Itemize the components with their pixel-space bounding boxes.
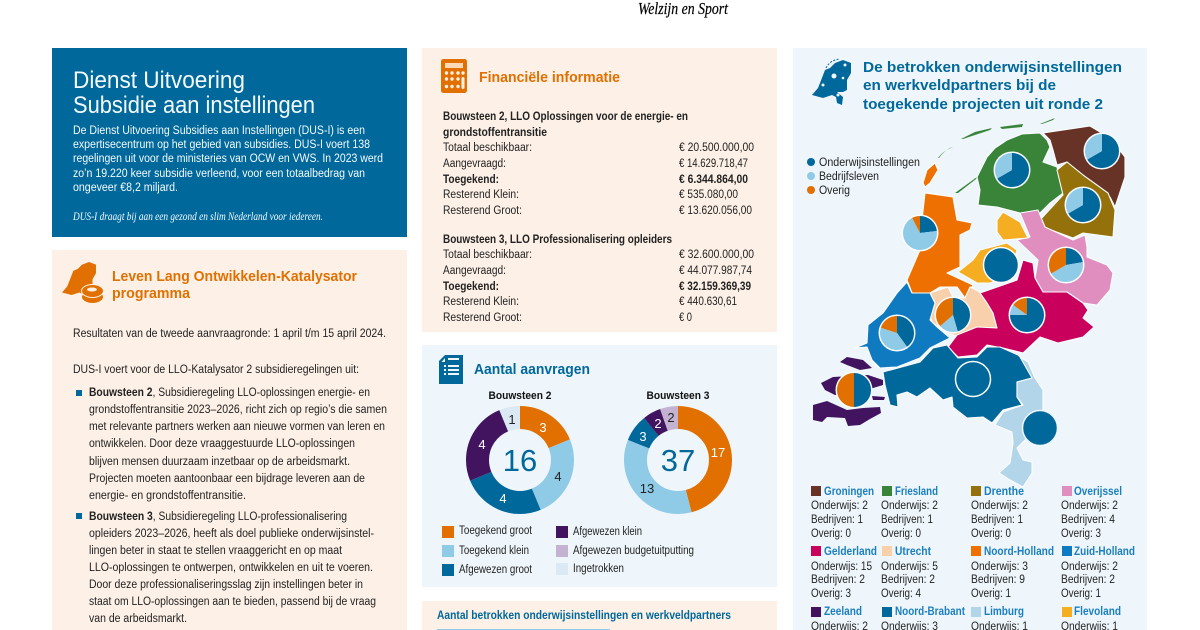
province list: row 2: Onderwijs: 2 <box>1061 561 1118 573</box>
table: Bouwsteen 3 finance: Aangevraagd: <box>443 265 506 277</box>
icon: document <box>439 355 463 384</box>
province list: row 1: Bedrijven: 4 <box>1061 514 1116 526</box>
legend: aanvragen status: Afgewezen klein <box>573 526 642 538</box>
province: Overijssel <box>1017 210 1113 305</box>
text block: results period: Resultaten van de tweede aanvraagronde: 1 april t/m 15 april 2024. <box>73 328 386 340</box>
text block: DUS-I description: zo’n 19.220 keer subsidie verleend, voor een totaalbedrag van <box>73 168 365 180</box>
pie: Noord-Holland <box>902 214 938 252</box>
table: Bouwsteen 2 finance: Aangevraagd: <box>443 158 506 170</box>
pie: Noord-Brabant <box>956 362 990 396</box>
province list: row 3: Zeeland <box>824 606 862 618</box>
province list: row 1: Overig: 0 <box>811 528 851 540</box>
province: Drenthe <box>1040 162 1115 238</box>
table: Bouwsteen 2 finance: Resterend Groot: <box>443 205 522 217</box>
text block: DUS-I description: ongeveer €8,2 miljard. <box>73 182 178 194</box>
province list: row 1: Drenthe <box>984 486 1024 498</box>
province list: row 3 <box>811 606 1121 630</box>
legend: aanvragen status: Ingetrokken <box>573 563 624 575</box>
legend: aanvragen status: Toegekend groot <box>459 525 533 537</box>
text block: DUS-I description: DUS-I draagt bij aan een gezond en slim Nederland voor iedereen. <box>72 209 323 223</box>
table: Bouwsteen 3 finance: Bouwsteen 3, LLO Professionalisering opleiders <box>443 234 672 246</box>
bullet: Bouwsteen 3 <box>76 511 376 625</box>
table: Bouwsteen 3 finance: € 0 <box>679 312 692 324</box>
table: Bouwsteen 3 finance: € 440.630,61 <box>679 296 737 308</box>
legend: aanvragen status: Afgewezen budgetuitputting <box>573 545 694 557</box>
donut chart: Bouwsteen 3: 2 <box>654 416 662 431</box>
province list: row 1: Overig: 0 <box>881 528 921 540</box>
legend: partner types <box>807 157 920 197</box>
heading: Dienst Uitvoering: Subsidie aan instellingen <box>73 92 315 119</box>
pie: Groningen <box>1084 132 1120 170</box>
bullet: Bouwsteen 3: Door deze professionaliseringsslag zijn instellingen beter in <box>89 579 363 591</box>
text block: DUS-I description: regelingen uit voor de ministeries van OCW en VWS. In 2023 werd <box>73 153 383 165</box>
table: Bouwsteen 2 finance: € 535.080,00 <box>679 189 738 201</box>
panel: Leven Lang Ontwikkelen-Katalysator programma <box>52 250 407 630</box>
heading: map title <box>863 59 1122 113</box>
bullet: Bouwsteen 3: LLO-oplossingen te ontwerpen, ontwikkelen en uit te voeren. <box>89 562 373 574</box>
province list: row 1: Overijssel <box>1074 486 1122 498</box>
province list: row 1 <box>811 486 1122 540</box>
heading: programme: Leven Lang Ontwikkelen-Katalysator <box>112 268 357 285</box>
text block: DUS-I description: expertisecentrum op het gebied van subsidies. DUS-I voert 138 <box>73 139 370 151</box>
province: Flevoland <box>958 212 1028 283</box>
donut chart: Bouwsteen 2 <box>478 390 562 506</box>
heading: map title: en werkveldpartners bij de <box>863 77 1056 94</box>
province list: row 1: Bedrijven: 1 <box>971 514 1023 526</box>
province: Zuid-Holland <box>855 282 950 368</box>
pie: Friesland <box>994 152 1030 188</box>
province list: row 2: Bedrijven: 9 <box>971 574 1025 586</box>
province: Noord-Holland <box>907 163 973 298</box>
province: Limburg <box>995 357 1043 487</box>
donut chart: Bouwsteen 3: 3 <box>639 429 647 444</box>
bullet: Bouwsteen 2: Bouwsteen 2, Subsidieregeling LLO-oplossingen energie- en <box>89 387 370 399</box>
province list: row 1: Onderwijs: 2 <box>971 500 1028 512</box>
table: Bouwsteen 3 finance: € 32.600.000,00 <box>679 249 754 261</box>
province list: row 2: Zuid-Holland <box>1074 546 1135 558</box>
province list: row 2: Overig: 4 <box>881 588 922 600</box>
table: Bouwsteen 2 finance: grondstoffentransitie <box>443 127 547 139</box>
table: Bouwsteen 3 finance <box>443 234 754 324</box>
text block: DUS-I description: De Dienst Uitvoering Subsidies aan Instellingen (DUS-I) is een <box>73 125 365 137</box>
table: Bouwsteen 2 finance: € 20.500.000,00 <box>679 142 754 154</box>
province list: row 1: Onderwijs: 2 <box>811 500 868 512</box>
province list: row 1: Groningen <box>824 486 874 498</box>
bullet: Bouwsteen 3: staat om LLO-oplossingen aan te bieden, passend bij de vraag <box>89 596 376 608</box>
legend: partner types: Onderwijsinstellingen <box>819 157 920 169</box>
text block: DUS-I description <box>72 125 383 223</box>
legend: aanvragen status: Afgewezen groot <box>459 564 533 576</box>
province: Groningen <box>1043 126 1125 207</box>
panel: Financiële informatie <box>422 48 777 332</box>
table: Bouwsteen 2 finance: € 13.620.056,00 <box>679 205 752 217</box>
province: Gelderland <box>948 260 1094 357</box>
province list: row 1: Onderwijs: 2 <box>1061 500 1118 512</box>
table: Bouwsteen 3 finance: € 32.159.369,39 <box>679 281 751 293</box>
pie: Limburg <box>1022 410 1058 446</box>
province: Friesland <box>977 133 1063 213</box>
province list: row 2: Onderwijs: 3 <box>971 561 1028 573</box>
legend: aanvragen status <box>442 525 694 576</box>
panel: betrokken onderwijsinstellingen map <box>793 48 1147 630</box>
donut chart: Bouwsteen 2: 16 <box>503 443 537 478</box>
donut chart: Bouwsteen 3: 13 <box>640 481 654 496</box>
heading: Financiële informatie: Financiële informatie <box>479 69 620 86</box>
pie: Overijssel <box>1048 246 1084 284</box>
province list: row 2: Onderwijs: 15 <box>811 561 872 573</box>
bullet: Bouwsteen 2: grondstoffentransitie 2023–2026, richt zich op regio’s die samen <box>89 404 387 416</box>
bullet: Bouwsteen 2: blijven mensen duurzaam inzetbaar op de arbeidsmarkt. <box>89 456 350 468</box>
table: Bouwsteen 2 finance: Resterend Klein: <box>443 189 519 201</box>
province list: row 3: Limburg <box>984 606 1024 618</box>
table: Bouwsteen 2 finance: Toegekend: <box>443 174 499 186</box>
pie: Utrecht <box>934 296 972 334</box>
heading: programme: programma <box>112 285 191 302</box>
table: Bouwsteen 3 finance: Totaal beschikbaar: <box>443 249 532 261</box>
province list: row 2: Gelderland <box>824 546 877 558</box>
province list: row 2: Onderwijs: 5 <box>881 561 938 573</box>
table: Bouwsteen 2 finance <box>443 111 754 217</box>
province list: row 2: Overig: 1 <box>971 588 1011 600</box>
heading: map title: De betrokken onderwijsinstellingen <box>863 59 1122 76</box>
bullet: Bouwsteen 3: van de arbeidsmarkt. <box>89 613 187 625</box>
donut chart: Bouwsteen 3: 17 <box>711 445 725 460</box>
province: Zeeland <box>813 357 885 426</box>
province: Utrecht <box>930 287 997 337</box>
bar chart: top edge of bar <box>437 629 610 630</box>
icon: Netherlands map <box>812 59 851 105</box>
donut chart: Bouwsteen 2: 3 <box>539 420 547 435</box>
bullet: Bouwsteen 3: lingen beter in staat te stellen vraaggericht en op maat <box>89 545 343 557</box>
donut chart: Bouwsteen 3 <box>636 390 725 502</box>
bullet: Bouwsteen 2: Projecten moeten aantoonbaar een bijdrage leveren aan de <box>89 473 365 485</box>
pie: Zeeland <box>836 372 872 408</box>
province list: row 1: Bedrijven: 1 <box>811 514 863 526</box>
legend: aanvragen status: Toegekend klein <box>459 545 529 557</box>
map: provinces of the Netherlands <box>813 118 1125 487</box>
province list: row 1: Friesland <box>895 486 938 498</box>
province list: row 2: Utrecht <box>895 546 931 558</box>
province list: row 1: Bedrijven: 1 <box>881 514 933 526</box>
bullet: Bouwsteen 3: Bouwsteen 3, Subsidieregeling LLO-professionalisering <box>89 511 347 523</box>
donut chart: Bouwsteen 2: 1 <box>508 412 516 427</box>
table: Bouwsteen 3 finance: € 44.077.987,74 <box>679 265 753 277</box>
pie: Drenthe <box>1064 186 1102 224</box>
legend: partner types: Bedrijfsleven <box>819 171 879 183</box>
pie: Gelderland <box>1008 296 1046 334</box>
donut chart: Bouwsteen 3: 37 <box>661 443 695 478</box>
panel: Dienst Uitvoering Subsidie aan instellingen <box>52 48 407 237</box>
panel: Aantal betrokken onderwijsinstellingen <box>422 601 777 630</box>
province list: row 3: Flevoland <box>1074 606 1121 618</box>
donut chart: Bouwsteen 3: Bouwsteen 3 <box>646 390 710 402</box>
bullet: Bouwsteen 2: met relevante partners werken aan nieuwe vormen van leren en <box>89 421 385 433</box>
table: Bouwsteen 3 finance: Resterend Groot: <box>443 312 522 324</box>
panel: Aantal aanvragen <box>422 345 777 587</box>
legend: partner types: Overig <box>819 185 850 197</box>
text block: intro: DUS-I voert voor de LLO-Katalysator 2 subsidieregelingen uit: <box>73 364 359 376</box>
bullet: Bouwsteen 2: energie- en grondstoffentransitie. <box>89 490 246 502</box>
province list: row 2: Noord-Holland <box>984 546 1054 558</box>
table: Bouwsteen 3 finance: Resterend Klein: <box>443 296 519 308</box>
heading: Dienst Uitvoering <box>73 67 315 119</box>
heading: Aantal aanvragen: Aantal aanvragen <box>474 361 590 378</box>
icon: calculator <box>441 59 467 93</box>
bullet: Bouwsteen 2: ontwikkelen. Door deze vraaggestuurde LLO-oplossingen <box>89 438 355 450</box>
province: Noord-Brabant <box>883 345 1032 423</box>
table: Bouwsteen 2 finance: € 14.629.718,47 <box>679 158 748 170</box>
table: Bouwsteen 2 finance: € 6.344.864,00 <box>679 174 748 186</box>
province list: row 2: Overig: 3 <box>811 588 851 600</box>
heading: programme <box>112 268 357 302</box>
province list: row 1: Overig: 3 <box>1061 528 1101 540</box>
heading: betrokken partners: Aantal betrokken onderwijsinstellingen en werkveldpartners <box>437 610 731 622</box>
pie: Zuid-Holland <box>878 314 916 352</box>
donut chart: Bouwsteen 2: 4 <box>554 469 562 484</box>
province list: row 2: Bedrijven: 2 <box>1061 574 1115 586</box>
donut chart: Bouwsteen 2: Bouwsteen 2 <box>488 390 552 402</box>
table: Bouwsteen 2 finance: Bouwsteen 2, LLO Oplossingen voor de energie- en <box>443 111 688 123</box>
donut chart: Bouwsteen 2: 4 <box>478 437 486 452</box>
table: Bouwsteen 3 finance: Toegekend: <box>443 281 499 293</box>
bullet: Bouwsteen 2 <box>76 387 387 502</box>
heading: map title: toegekende projecten uit ronde 2 <box>863 96 1103 113</box>
pie: Flevoland <box>984 248 1018 282</box>
province list: row 2 <box>811 546 1135 600</box>
province list: row 2: Bedrijven: 2 <box>811 574 865 586</box>
province list: row 2: Bedrijven: 2 <box>881 574 935 586</box>
province list: row 1: Onderwijs: 2 <box>881 500 938 512</box>
bullet: Bouwsteen 3: opleiders 2023–2026, heeft als doel publieke onderwijsinstel- <box>89 528 374 540</box>
province list: row 2: Overig: 1 <box>1061 588 1101 600</box>
donut chart: Bouwsteen 3: 2 <box>667 410 675 425</box>
heading: Dienst Uitvoering: Dienst Uitvoering <box>73 67 245 94</box>
province: Wadden islands <box>938 118 1055 193</box>
province list: row 3: Noord-Brabant <box>895 606 965 618</box>
icon: Netherlands with coins <box>62 262 104 304</box>
table: Bouwsteen 2 finance: Totaal beschikbaar: <box>443 142 532 154</box>
province list: row 1: Overig: 0 <box>971 528 1011 540</box>
donut chart: Bouwsteen 2: 4 <box>499 491 507 506</box>
